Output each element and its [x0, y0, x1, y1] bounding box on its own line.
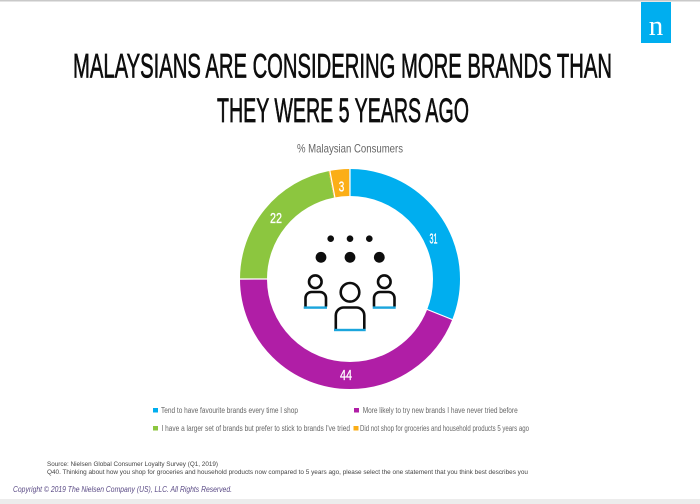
donut chart — [239, 168, 453, 384]
source note: Q40. Thinking about how you shop for groceries and household products now compared to 5 years ago, please select the one statement that you think best describes you — [47, 469, 528, 476]
chart subtitle: % Malaysian Consumers — [297, 142, 403, 156]
source note — [47, 461, 528, 476]
data labels: 44 — [340, 367, 352, 384]
logo: Nielsen n — [641, 2, 671, 43]
icon: people considering brands — [304, 235, 396, 331]
source note: Source: Nielsen Global Consumer Loyalty Survey (Q1, 2019) — [47, 461, 218, 468]
logo: Nielsen n: n — [649, 10, 664, 42]
data labels: 22 — [270, 210, 282, 227]
data labels: 3 — [339, 178, 344, 196]
donut chart: 31 — [430, 230, 438, 248]
legend — [153, 406, 529, 433]
copyright: Copyright © 2019 The Nielsen Company (US), LLC. All Rights Reserved. — [13, 485, 232, 494]
legend item: larger set: I have a larger set of brands but prefer to stick to brands I've tried — [162, 424, 350, 433]
title — [73, 48, 612, 130]
legend item: try new brands: More likely to try new brands I have never tried before — [363, 406, 518, 415]
data labels — [270, 178, 438, 384]
legend item: did not shop: Did not shop for groceries and household products 5 years ago — [360, 424, 529, 433]
title: THEY WERE 5 YEARS AGO — [217, 92, 469, 130]
legend item: favourite brands: Tend to have favourite brands every time I shop — [161, 406, 298, 415]
